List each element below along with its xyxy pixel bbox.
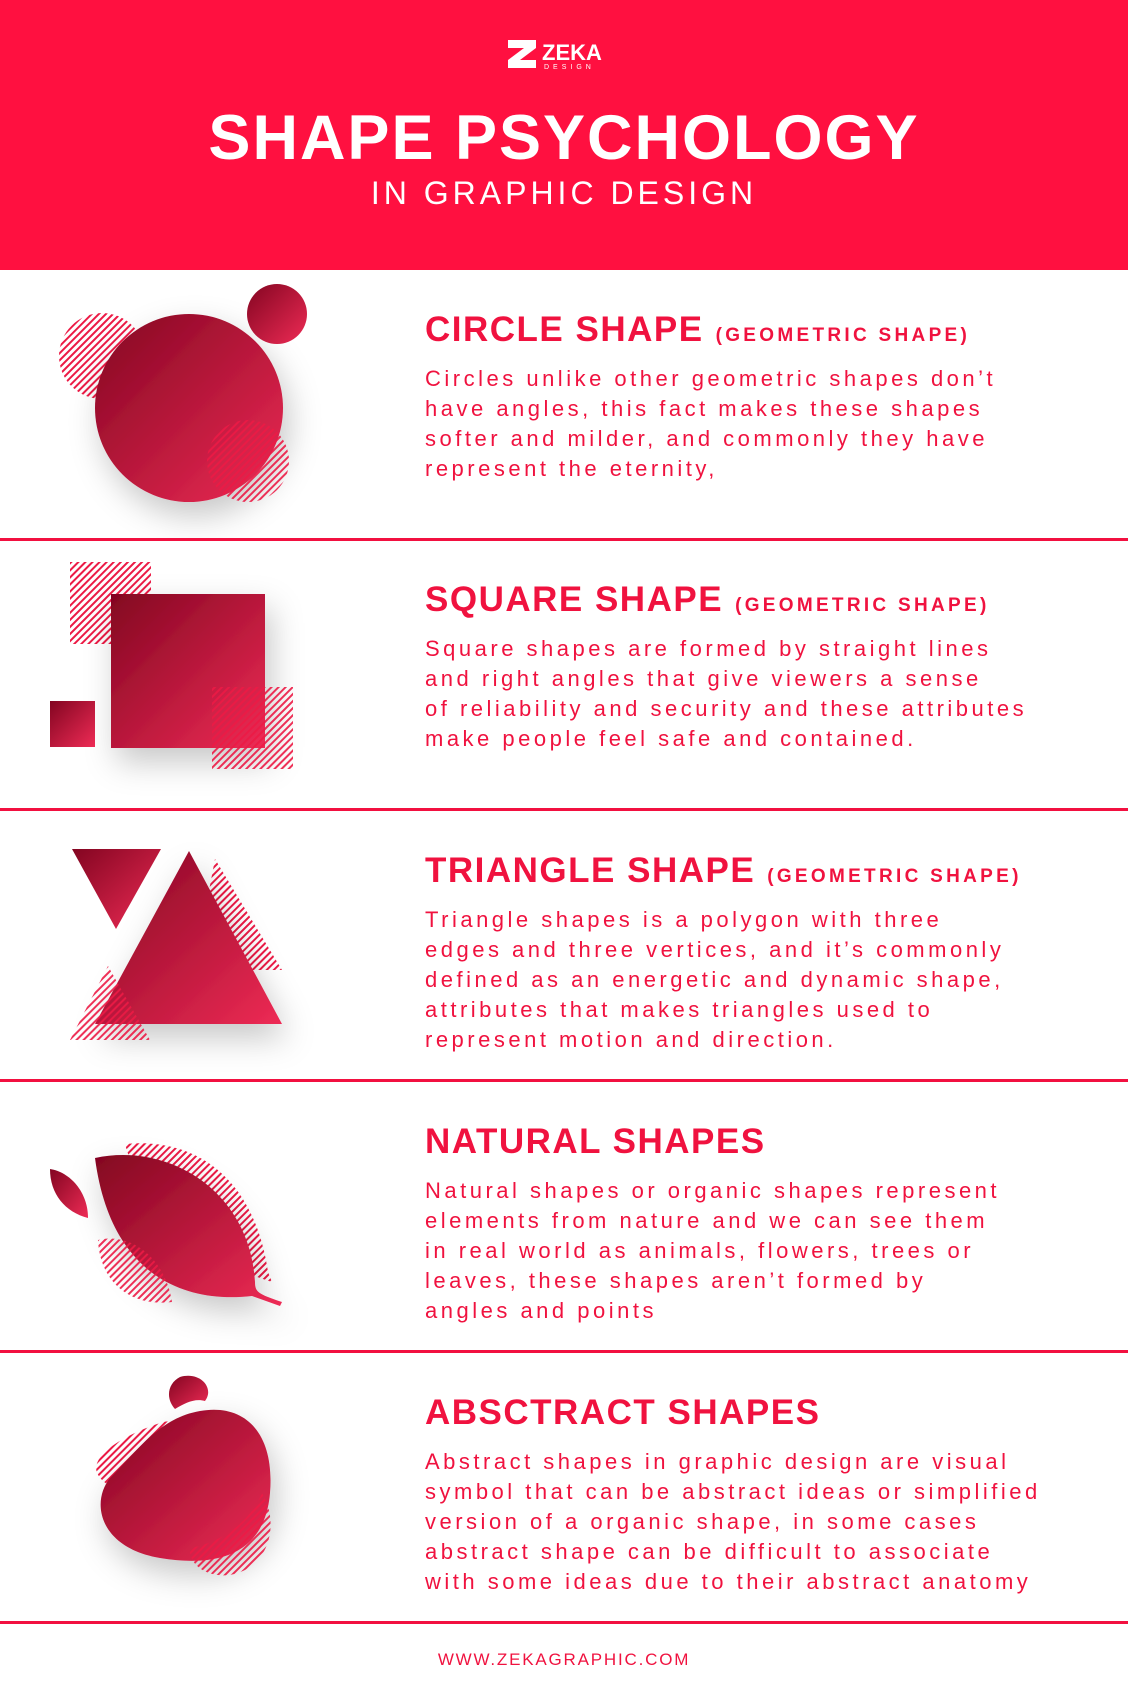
text: elements from nature and we can see them — [425, 1208, 988, 1233]
panel: natural — [0, 1082, 1128, 1353]
text: attributes that makes triangles used to — [425, 997, 933, 1022]
panel: square — [0, 540, 1128, 811]
text: and right angles that give viewers a sense — [425, 666, 982, 691]
subtitle: IN GRAPHIC DESIGN — [371, 175, 757, 211]
text — [425, 366, 996, 481]
text: leaves, these shapes aren’t formed by — [425, 1268, 926, 1293]
text: Circles unlike other geometric shapes don’t — [425, 366, 996, 391]
text — [425, 1449, 1041, 1594]
header — [0, 0, 1128, 270]
text: make people feel safe and contained. — [425, 726, 917, 751]
icon: squares — [50, 562, 293, 778]
heading: NATURAL SHAPES — [425, 1122, 766, 1161]
text: softer and milder, and commonly they have — [425, 426, 988, 451]
text: defined as an energetic and dynamic shape, — [425, 967, 1004, 992]
text — [425, 1178, 1000, 1323]
heading: SQUARE SHAPE (GEOMETRIC SHAPE) — [425, 580, 990, 619]
text: version of a organic shape, in some cases — [425, 1509, 979, 1534]
text — [425, 907, 1004, 1052]
text — [425, 636, 1027, 751]
text: Square shapes are formed by straight lines — [425, 636, 991, 661]
logo: ZEKA — [542, 40, 602, 65]
text: angles and points — [425, 1298, 657, 1323]
footer: WWW.ZEKAGRAPHIC.COM — [438, 1650, 690, 1669]
title: SHAPE PSYCHOLOGY — [208, 103, 920, 173]
text: Triangle shapes is a polygon with three — [425, 907, 942, 932]
panel: triangle — [0, 811, 1128, 1082]
icon: triangles — [70, 849, 293, 1054]
text: with some ideas due to their abstract anatomy — [425, 1569, 1031, 1594]
heading: TRIANGLE SHAPE (GEOMETRIC SHAPE) — [425, 851, 1022, 890]
icon: circles — [59, 284, 307, 531]
icon: leaf — [50, 1143, 282, 1326]
text: represent motion and direction. — [425, 1027, 837, 1052]
panel: abstract — [0, 1353, 1128, 1624]
heading: CIRCLE SHAPE (GEOMETRIC SHAPE) — [425, 310, 970, 349]
text: represent the eternity, — [425, 456, 718, 481]
text: have angles, this fact makes these shapes — [425, 396, 983, 421]
text: symbol that can be abstract ideas or simplified — [425, 1479, 1041, 1504]
text: Abstract shapes in graphic design are visual — [425, 1449, 1009, 1474]
text: abstract shape can be difficult to associate — [425, 1539, 993, 1564]
panel: circle — [0, 270, 1128, 541]
icon: blobs — [93, 1376, 292, 1590]
text: of reliability and security and these attributes — [425, 696, 1027, 721]
logo — [508, 40, 602, 70]
text: in real world as animals, flowers, trees or — [425, 1238, 974, 1263]
text: Natural shapes or organic shapes represent — [425, 1178, 1000, 1203]
heading: ABSCTRACT SHAPES — [425, 1393, 820, 1432]
text: edges and three vertices, and it’s commonly — [425, 937, 1004, 962]
